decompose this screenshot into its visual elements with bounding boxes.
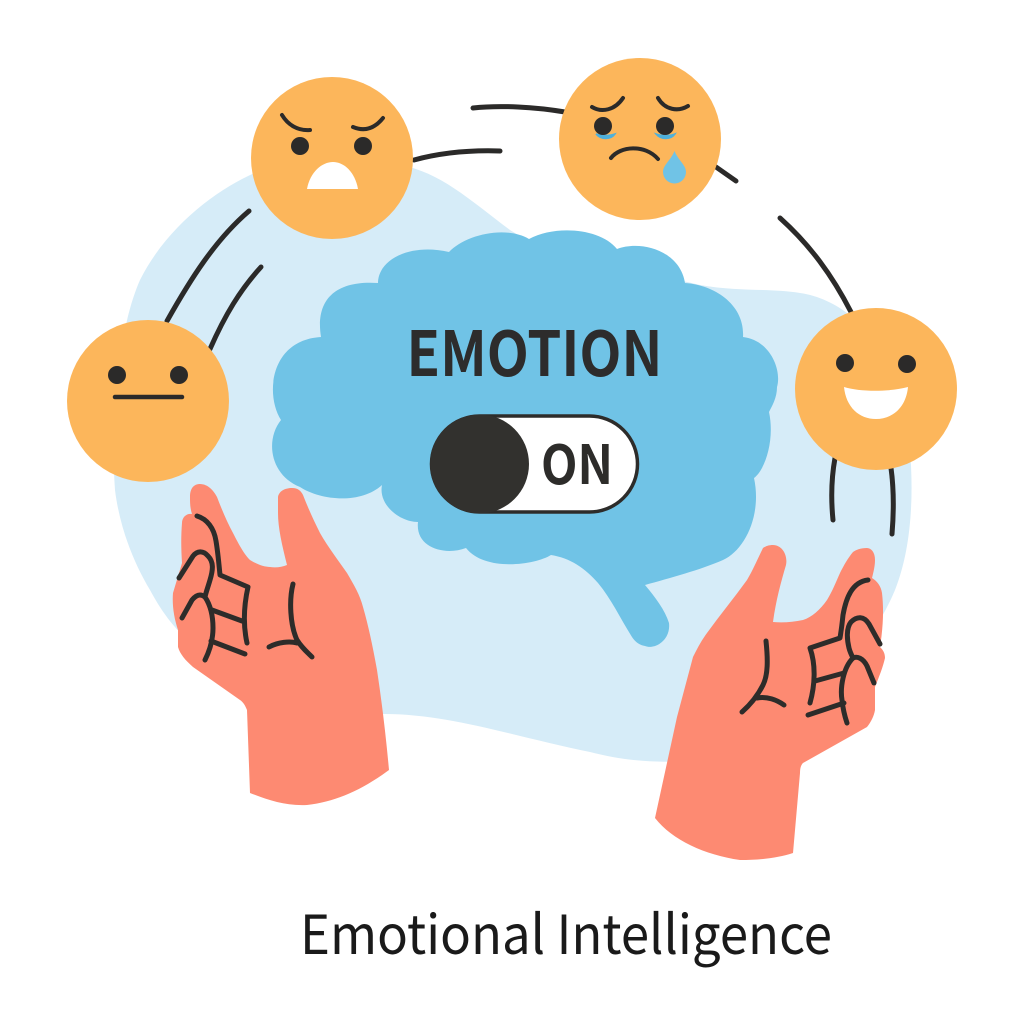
arcs connecting emotions [167,107,893,534]
toggle switch: ON: ON [541,421,613,500]
brain speech bubble [272,230,778,647]
emoji: happy [795,308,957,470]
caption: Emotional Intelligence [300,891,832,970]
heading: EMOTION: EMOTION [406,304,662,394]
emoji: neutral [67,320,229,482]
emoji: angry [251,77,413,239]
background blob [114,161,912,762]
toggle switch: ON [430,414,638,514]
left hand [173,484,389,805]
right hand [655,545,885,860]
emoji: crying [559,58,721,220]
